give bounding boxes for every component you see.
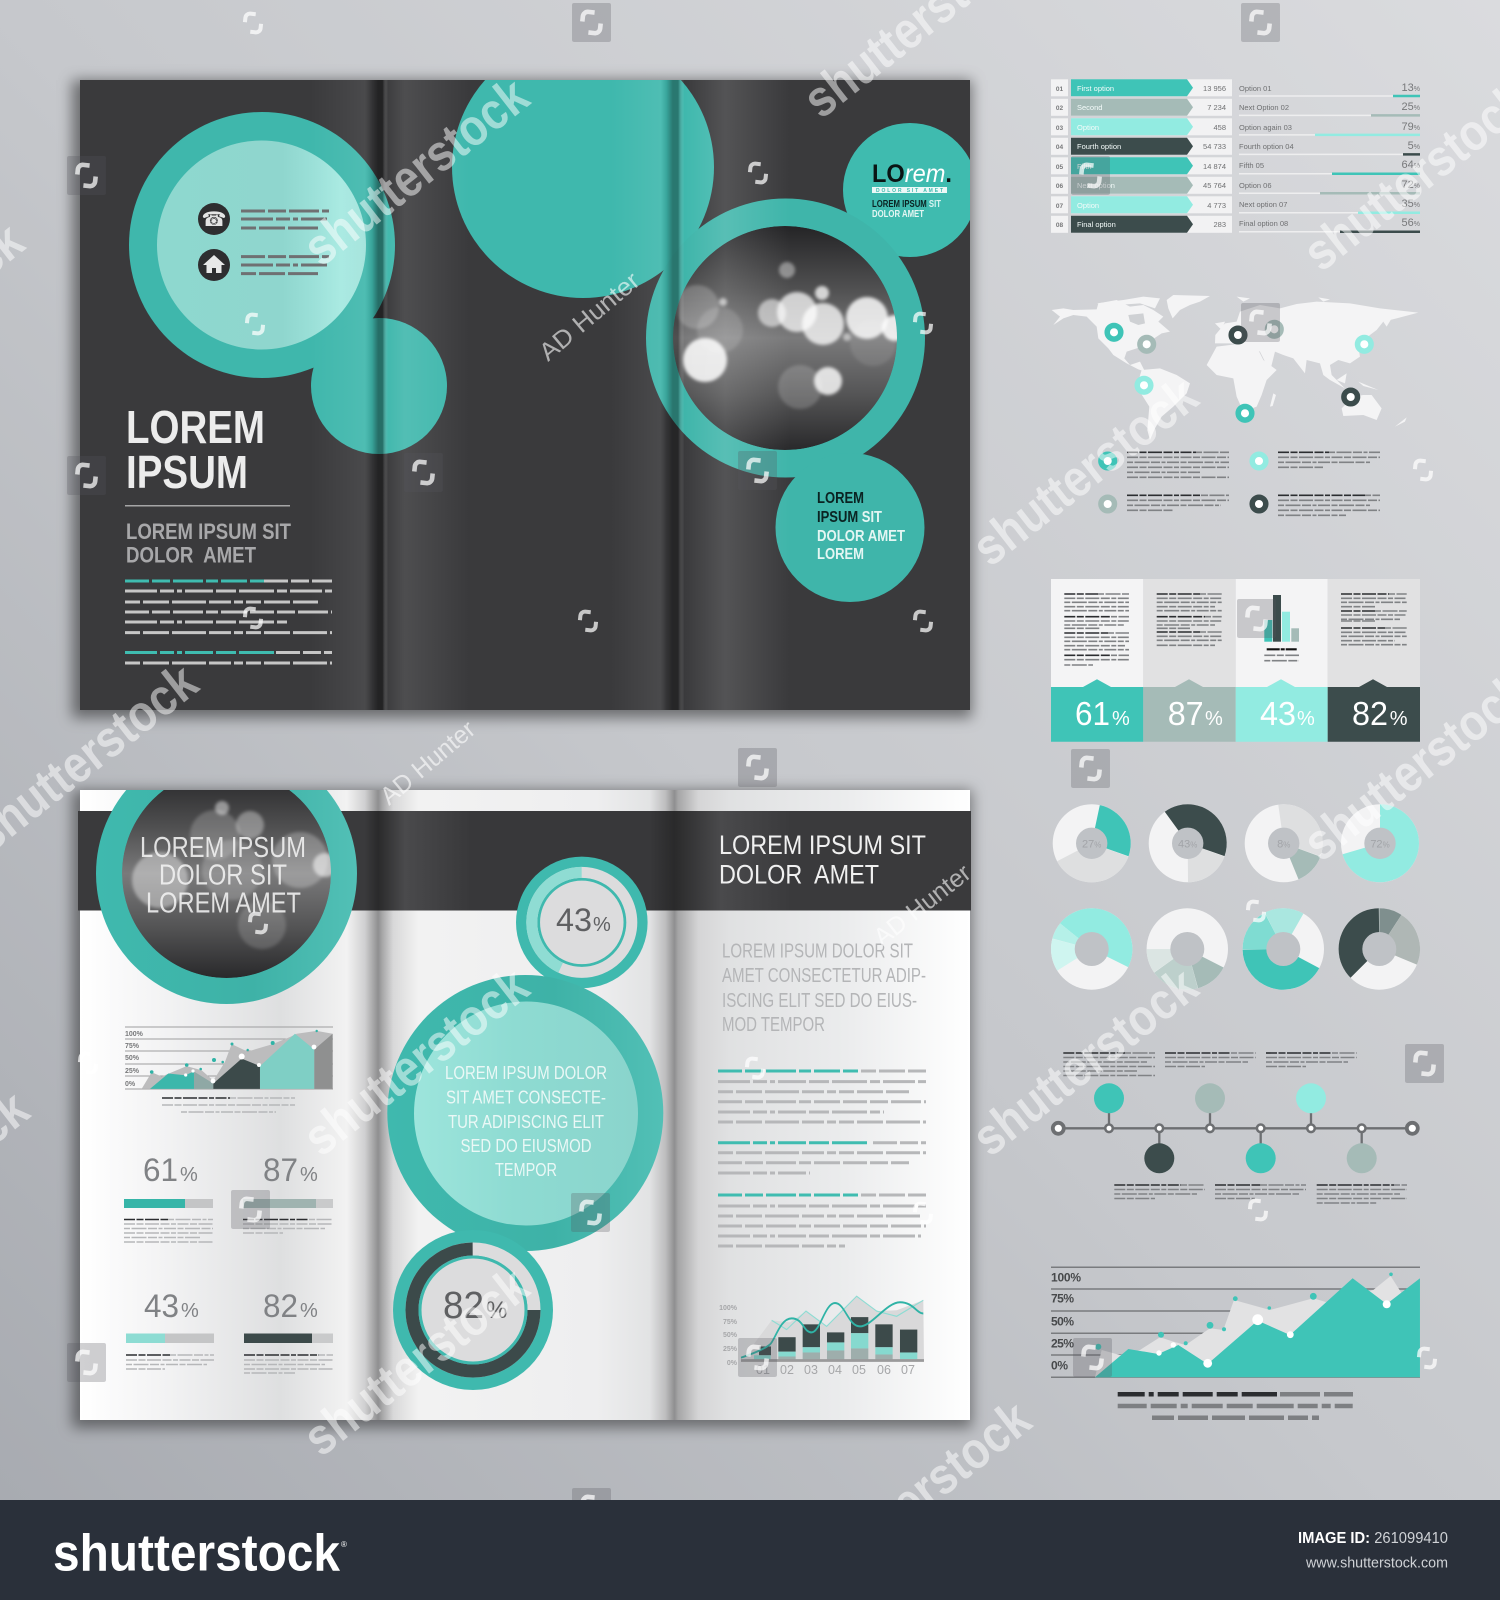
panel: four stat columns: 43	[1260, 695, 1296, 732]
large area chart	[1051, 1267, 1420, 1377]
panel: percentage list: Final option 08	[1239, 219, 1288, 228]
pie chart: 72%: 72%	[1370, 838, 1390, 850]
timeline text blocks	[1063, 1053, 1407, 1203]
pie chart: 43%	[1149, 804, 1227, 882]
pie chart: 27%	[1053, 804, 1131, 882]
ring gauge: 82%: 82	[443, 1285, 484, 1327]
right page intro text: AMET CONSECTETUR ADIP-	[722, 965, 926, 987]
panel: data table: 458	[1213, 123, 1226, 132]
watermark text: shutterstock	[962, 957, 1209, 1167]
right page heading: LOREM IPSUM SIT	[719, 830, 926, 860]
right page intro text	[722, 940, 926, 1036]
large area chart: 0%	[1051, 1358, 1068, 1372]
panel: percentage list: 56%	[1402, 217, 1420, 229]
column 3 mini bar chart	[1264, 595, 1299, 661]
panel: percentage list: 79%	[1402, 121, 1420, 133]
watermark text: shutterstock	[795, 1390, 1042, 1600]
combo bar and line chart: 06	[877, 1363, 891, 1377]
small area chart: 25%	[125, 1068, 140, 1075]
panel: four stat columns: 82	[1352, 695, 1388, 732]
photo ring	[646, 198, 925, 478]
panel: data table: 04	[1056, 144, 1063, 151]
ring gauge: 43%: 43	[556, 902, 592, 938]
text in teal circle: LOREM	[817, 490, 864, 507]
cover body text lines	[125, 581, 332, 663]
panel: data table: 45 764	[1203, 181, 1226, 190]
panel: percentage list: 72%	[1402, 179, 1420, 191]
panel: percentage list: Option 01	[1239, 84, 1272, 93]
ring gauge: 43%: %	[593, 914, 611, 936]
stat: 87%	[243, 1152, 333, 1233]
panel: data table: Second	[1077, 103, 1102, 112]
logo: Lorem: DOLOR SIT AMET	[876, 188, 943, 194]
watermark text: AD Hunter	[868, 859, 976, 952]
central teal circle: LOREM IPSUM DOLOR	[445, 1063, 607, 1083]
panel: four stat columns: 87	[1168, 695, 1204, 732]
cover title: IPSUM	[126, 446, 248, 498]
watermark text: shutterstock	[293, 957, 540, 1167]
panel: data table: Option	[1077, 123, 1099, 132]
right page heading	[719, 830, 926, 890]
panel: data table: 03	[1056, 125, 1063, 132]
cover subtitle: DOLOR AMET	[126, 542, 256, 568]
combo bar and line chart: 50%	[723, 1332, 738, 1339]
header ring with photo	[96, 790, 357, 1004]
panel: data table: Final option	[1077, 220, 1116, 229]
ring gauge: 82%	[393, 1230, 553, 1390]
logo: Lorem: LOREM IPSUM SIT	[872, 199, 941, 210]
stat: 43%: %	[181, 1300, 199, 1322]
pie chart: 8%	[1245, 804, 1323, 882]
cover subtitle	[126, 519, 291, 568]
panel: percentage list: 35%	[1402, 198, 1420, 210]
panel: data table: Option	[1077, 201, 1099, 210]
panel: data table: 07	[1056, 203, 1063, 210]
column 4 text	[1341, 594, 1407, 645]
pie chart: 27%: 27%	[1082, 838, 1101, 850]
cover title	[126, 401, 265, 498]
large area chart: 100%	[1051, 1271, 1081, 1285]
right page intro text: ISCING ELIT SED DO EIUS-	[722, 990, 917, 1012]
panel: data table: Fifth	[1077, 162, 1092, 171]
small area chart: 0%	[125, 1081, 136, 1088]
panel: data table: 05	[1056, 164, 1063, 171]
panel: brochure inside spread	[72, 743, 972, 1428]
icon: phone	[198, 203, 230, 235]
combo bar and line chart: 25%	[723, 1346, 738, 1353]
panel: data table: 283	[1213, 220, 1226, 229]
panel: data table: 01	[1056, 86, 1063, 93]
panel: data table: 7 234	[1207, 103, 1226, 112]
watermark text: AD Hunter	[375, 715, 481, 811]
world map	[1052, 295, 1418, 440]
stat: 43%: 43	[144, 1288, 179, 1324]
right page body text	[718, 1071, 926, 1246]
central teal circle: TUR ADIPISCING ELIT	[448, 1112, 604, 1132]
cover subtitle: LOREM IPSUM SIT	[126, 519, 291, 544]
icon: phone: ☎	[202, 207, 226, 231]
panel: four stat columns: 61	[1075, 695, 1110, 732]
panel: percentage list: Option again 03	[1239, 123, 1292, 132]
map legend	[1101, 452, 1380, 515]
watermark text: shutterstock	[293, 67, 540, 277]
stat: 43%	[126, 1288, 214, 1369]
panel: data table: 54 733	[1203, 142, 1226, 151]
panel: percentage list: Fifth 05	[1239, 161, 1264, 170]
panel: data table: Fourth option	[1077, 142, 1121, 151]
panel: data table: First option	[1077, 84, 1114, 93]
pie chart: 72%	[1341, 804, 1419, 882]
panel: percentage list: Next option 07	[1239, 200, 1287, 209]
panel: percentage list: Next Option 02	[1239, 103, 1289, 112]
panel: percentage list: Option 06	[1239, 181, 1272, 190]
donut chart: teal	[1243, 908, 1324, 990]
footer bar	[0, 1500, 1500, 1600]
central teal circle: TEMPOR	[495, 1160, 557, 1180]
header photo text: LOREM AMET	[146, 888, 301, 920]
big teal circle	[452, 80, 714, 298]
panel: data table: 13 956	[1203, 84, 1226, 93]
text in teal circle: DOLOR AMET	[817, 528, 905, 545]
panel: four stat columns: %	[1205, 708, 1223, 730]
footer bar: ®	[341, 1540, 347, 1549]
panel: brochure cover spread	[72, 36, 977, 718]
ring gauge: 82%: %	[486, 1297, 507, 1324]
right page heading: DOLOR AMET	[719, 860, 879, 890]
pie chart: 43%: 43%	[1178, 838, 1197, 850]
stat: 61%: 61	[143, 1152, 178, 1188]
combo bar and line chart: 05	[852, 1363, 866, 1377]
stat: 61%	[124, 1152, 213, 1242]
small area chart: 75%	[125, 1043, 140, 1050]
ring gauge: 43%	[515, 856, 648, 989]
stat: 87%: 87	[263, 1152, 298, 1188]
right page intro text: MOD TEMPOR	[722, 1014, 825, 1036]
watermark text: AD Hunter	[534, 267, 645, 367]
footer url: www.shutterstock.com	[1305, 1554, 1448, 1572]
watermark text: shutterstock	[962, 367, 1209, 577]
icon: home	[198, 249, 230, 281]
combo bar and line chart: 07	[901, 1363, 915, 1377]
cover title: LOREM	[126, 401, 265, 453]
combo bar and line chart: 100%	[719, 1305, 738, 1312]
panel: four stat columns	[1051, 579, 1420, 742]
stat: 82%: %	[300, 1300, 318, 1322]
combo bar and line chart: 0%	[727, 1360, 738, 1367]
image id: IMAGE ID: 261099410	[1298, 1530, 1448, 1547]
large area chart: 25%	[1051, 1337, 1074, 1351]
map markers	[1107, 322, 1371, 420]
combo bar and line chart: 03	[804, 1363, 818, 1377]
contact circle	[129, 112, 447, 454]
column 1 text	[1064, 594, 1129, 665]
stat: 87%: %	[300, 1164, 318, 1186]
small area chart: 100%	[125, 1031, 144, 1038]
text circle	[776, 453, 924, 602]
combo bar and line chart: 75%	[723, 1319, 738, 1326]
panel: data table: 02	[1056, 105, 1063, 112]
donut chart: grey teal	[1147, 908, 1228, 990]
panel: data table: 06	[1056, 183, 1063, 190]
combo bar and line chart: 02	[780, 1363, 794, 1377]
panel: data table: 4 773	[1207, 201, 1226, 210]
panel: percentage list: 5%	[1408, 140, 1420, 152]
stat: 61%: %	[180, 1164, 198, 1186]
panel: percentage list: 25%	[1402, 101, 1420, 113]
central teal circle: SED DO EIUSMOD	[460, 1136, 592, 1156]
panel: four stat columns: %	[1112, 708, 1130, 730]
timeline	[1053, 1083, 1418, 1173]
text in teal circle: IPSUM SIT	[817, 509, 882, 526]
panel: data table	[1051, 79, 1232, 233]
combo bar and line chart: 04	[828, 1363, 842, 1377]
donut chart: dark	[1339, 908, 1420, 990]
text in teal circle: LOREM	[817, 546, 864, 563]
panel: percentage list	[1239, 82, 1420, 232]
small area chart	[125, 1027, 333, 1112]
header photo text	[140, 832, 306, 920]
central teal circle: SIT AMET CONSECTE-	[446, 1088, 606, 1108]
logo circle	[843, 123, 977, 257]
small area chart: 50%	[125, 1055, 140, 1062]
large area chart: 75%	[1051, 1292, 1074, 1306]
panel: four stat columns: %	[1297, 708, 1315, 730]
right page intro text: LOREM IPSUM DOLOR SIT	[722, 940, 913, 962]
combo bar and line chart: 01	[756, 1363, 770, 1377]
header photo text: DOLOR SIT	[159, 860, 287, 892]
pie chart: 8%: 8%	[1277, 838, 1290, 850]
stat: 82%: 82	[263, 1288, 298, 1324]
panel: data table: Next option	[1077, 181, 1115, 190]
header photo text: LOREM IPSUM	[140, 832, 306, 864]
chart caption lines	[1118, 1394, 1353, 1418]
stat: 82%	[244, 1288, 333, 1373]
bokeh photo	[673, 226, 908, 450]
logo: Lorem: DOLOR AMET	[872, 209, 924, 220]
combo bar and line chart	[719, 1296, 924, 1377]
panel: four stat columns: %	[1390, 708, 1408, 730]
central teal circle	[387, 975, 663, 1251]
panel: percentage list: 64%	[1402, 159, 1420, 171]
large area chart: 50%	[1051, 1315, 1074, 1329]
contact lines: phone	[241, 211, 329, 228]
column 2 text	[1157, 594, 1222, 645]
watermark text: shutterstock	[293, 1257, 540, 1467]
contact lines: home	[241, 257, 329, 274]
panel: data table: 14 874	[1203, 162, 1226, 171]
footer logo: shutterstock	[53, 1524, 340, 1582]
text in teal circle	[817, 490, 905, 563]
panel: data table: 08	[1056, 222, 1063, 229]
logo: Lorem	[872, 160, 952, 220]
logo: Lorem: LOrem.	[872, 160, 952, 188]
donut chart: light teal	[1051, 908, 1132, 990]
panel: percentage list: 13%	[1402, 82, 1420, 94]
panel: percentage list: Fourth option 04	[1239, 142, 1294, 151]
